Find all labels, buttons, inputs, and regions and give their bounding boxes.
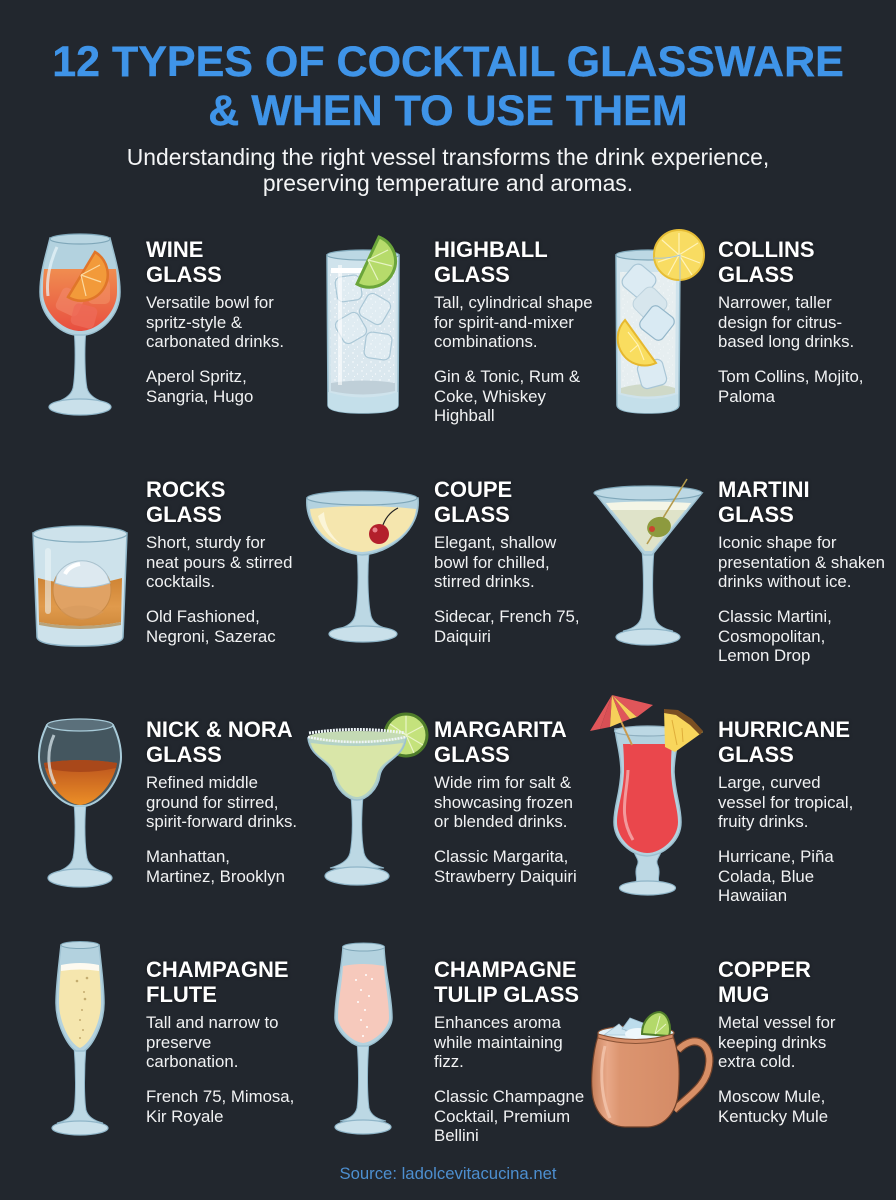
description <box>718 533 885 591</box>
description: vessel for tropical, <box>718 793 853 812</box>
description: ground for stirred, <box>146 793 278 812</box>
heading <box>146 957 289 1007</box>
heading: COUPE <box>434 477 512 502</box>
example drinks: Manhattan, <box>146 847 230 866</box>
description: Refined middle <box>146 773 258 792</box>
heading: ROCKS <box>146 477 225 502</box>
example drinks: Sangria, Hugo <box>146 387 253 406</box>
heading <box>718 477 810 527</box>
heading <box>718 717 850 767</box>
description: spirit-forward drinks. <box>146 812 297 831</box>
example drinks: Bellini <box>434 1126 479 1145</box>
description: fruity drinks. <box>718 812 808 831</box>
heading: COLLINS <box>718 237 815 262</box>
heading: MUG <box>718 982 769 1007</box>
description: carbonated drinks. <box>146 332 284 351</box>
heading <box>146 237 222 287</box>
description: while maintaining <box>434 1033 563 1052</box>
icon: rocks glass with ice sphere <box>32 525 128 647</box>
description: Tall, cylindrical shape <box>434 293 593 312</box>
heading <box>146 717 293 767</box>
description: combinations. <box>434 332 538 351</box>
description: Tall and narrow to <box>146 1013 278 1032</box>
icon: margarita glass with lime <box>307 712 428 886</box>
example drinks: Colada, Blue <box>718 867 814 886</box>
example drinks: Highball <box>434 406 495 425</box>
description <box>718 1013 836 1072</box>
description <box>718 293 854 351</box>
example drinks: Paloma <box>718 387 775 406</box>
example drinks: Martinez, Brooklyn <box>146 867 285 886</box>
heading <box>434 957 579 1007</box>
example drinks: Strawberry Daiquiri <box>434 867 577 886</box>
icon: copper mug with lime and ice <box>590 950 714 1130</box>
heading: MARTINI <box>718 477 810 502</box>
heading <box>434 717 567 767</box>
heading: CHAMPAGNE <box>434 957 577 982</box>
description: bowl for chilled, <box>434 553 550 572</box>
heading: COPPER <box>718 957 811 982</box>
subtitle <box>127 144 769 196</box>
heading <box>718 957 811 1007</box>
icon: collins glass with lemon <box>615 229 705 414</box>
description: Metal vessel for <box>718 1013 836 1032</box>
description: carbonation. <box>146 1052 238 1071</box>
example drinks: Tom Collins, Mojito, <box>718 367 863 386</box>
heading <box>434 477 512 527</box>
title <box>52 38 844 135</box>
example drinks: Coke, Whiskey <box>434 387 546 406</box>
panel: nick and nora glass <box>38 717 297 888</box>
example drinks <box>434 1087 584 1146</box>
example drinks <box>146 607 276 646</box>
example drinks <box>718 847 834 906</box>
heading: GLASS <box>146 262 222 287</box>
description: or blended drinks. <box>434 812 567 831</box>
icon: coupe glass with cherry <box>306 490 419 643</box>
subtitle: preserving temperature and aromas. <box>263 170 633 196</box>
description: preserve <box>146 1033 211 1052</box>
description <box>434 773 573 832</box>
description: drinks without ice. <box>718 572 851 591</box>
icon: nick and nora glass <box>38 718 122 888</box>
description <box>146 533 292 591</box>
example drinks: Gin & Tonic, Rum & <box>434 367 580 386</box>
heading <box>718 237 815 287</box>
description: presentation & shaken <box>718 553 885 572</box>
panel: rocks glass <box>32 477 292 647</box>
description: Iconic shape for <box>718 533 836 552</box>
example drinks <box>146 847 285 886</box>
description <box>434 293 593 351</box>
panel: champagne tulip glass <box>330 940 600 1148</box>
example drinks: Classic Margarita, <box>434 847 568 866</box>
panel: hurricane glass <box>586 692 882 900</box>
description <box>434 1013 563 1072</box>
description: spritz-style & <box>146 313 242 332</box>
icon: martini glass with olive <box>594 478 704 646</box>
description <box>146 773 297 831</box>
title: 12 TYPES OF COCKTAIL GLASSWARE <box>52 38 844 86</box>
description <box>718 773 853 832</box>
example drinks: Cosmopolitan, <box>718 627 825 646</box>
heading: GLASS <box>146 742 222 767</box>
example drinks <box>434 607 580 646</box>
example drinks <box>146 1087 294 1126</box>
description: Large, curved <box>718 773 821 792</box>
example drinks: Classic Champagne <box>434 1087 584 1106</box>
heading: CHAMPAGNE <box>146 957 289 982</box>
panel: martini glass <box>594 477 885 665</box>
example drinks: Sidecar, French 75, <box>434 607 580 626</box>
description: showcasing frozen <box>434 793 573 812</box>
description <box>146 293 284 351</box>
heading: GLASS <box>718 502 794 527</box>
example drinks: Old Fashioned, <box>146 607 260 626</box>
description: for spirit-and-mixer <box>434 313 574 332</box>
example drinks: Daiquiri <box>434 627 491 646</box>
description: Elegant, shallow <box>434 533 556 552</box>
panel: wine glass <box>39 233 284 416</box>
description: stirred drinks. <box>434 572 535 591</box>
description: Short, sturdy for <box>146 533 265 552</box>
example drinks: French 75, Mimosa, <box>146 1087 294 1106</box>
example drinks: Negroni, Sazerac <box>146 627 276 646</box>
heading <box>434 237 548 287</box>
description <box>146 1013 278 1072</box>
icon: champagne flute <box>48 940 112 1138</box>
description: Enhances aroma <box>434 1013 561 1032</box>
heading: GLASS <box>718 742 794 767</box>
heading: HIGHBALL <box>434 237 548 262</box>
example drinks: Hawaiian <box>718 886 787 905</box>
icon: champagne tulip glass <box>330 940 398 1138</box>
panel: champagne flute <box>48 940 296 1138</box>
source credit: Source: ladolcevitacucina.net <box>339 1164 557 1183</box>
heading: GLASS <box>146 502 222 527</box>
heading: TULIP GLASS <box>434 982 579 1007</box>
example drinks: Aperol Spritz, <box>146 367 247 386</box>
icon: wine glass with spritz <box>39 233 121 416</box>
panel: margarita glass <box>307 712 577 886</box>
description: cocktails. <box>146 572 215 591</box>
description <box>434 533 556 591</box>
heading: MARGARITA <box>434 717 567 742</box>
description: extra cold. <box>718 1052 795 1071</box>
title: & WHEN TO USE THEM <box>208 87 688 135</box>
description: fizz. <box>434 1052 464 1071</box>
example drinks <box>146 367 253 406</box>
description: Narrower, taller <box>718 293 832 312</box>
heading: GLASS <box>434 502 510 527</box>
example drinks: Hurricane, Piña <box>718 847 834 866</box>
icon: hurricane glass with umbrella and pineapple <box>586 692 708 900</box>
description: Wide rim for salt & <box>434 773 571 792</box>
description: neat pours & stirred <box>146 553 292 572</box>
example drinks <box>718 1087 828 1126</box>
heading: GLASS <box>434 262 510 287</box>
description: based long drinks. <box>718 332 854 351</box>
heading: GLASS <box>434 742 510 767</box>
heading: GLASS <box>718 262 794 287</box>
panel: copper mug <box>590 950 870 1130</box>
example drinks: Classic Martini, <box>718 607 832 626</box>
heading <box>146 477 225 527</box>
example drinks <box>434 847 577 886</box>
example drinks <box>718 367 863 406</box>
description: design for citrus- <box>718 313 842 332</box>
heading: FLUTE <box>146 982 217 1007</box>
description: keeping drinks <box>718 1033 826 1052</box>
example drinks: Lemon Drop <box>718 646 810 665</box>
heading: NICK & NORA <box>146 717 293 742</box>
example drinks: Cocktail, Premium <box>434 1107 570 1126</box>
icon: highball glass with lime <box>326 235 400 414</box>
subtitle: Understanding the right vessel transforms the drink experience, <box>127 144 769 170</box>
panel: collins glass <box>615 229 863 414</box>
example drinks <box>718 607 832 665</box>
example drinks: Moscow Mule, <box>718 1087 825 1106</box>
example drinks: Kir Royale <box>146 1107 223 1126</box>
description: Versatile bowl for <box>146 293 274 312</box>
heading: HURRICANE <box>718 717 850 742</box>
heading: WINE <box>146 237 203 262</box>
example drinks <box>434 367 580 425</box>
panel: coupe glass <box>306 477 580 646</box>
example drinks: Kentucky Mule <box>718 1107 828 1126</box>
panel: highball glass <box>326 235 593 425</box>
